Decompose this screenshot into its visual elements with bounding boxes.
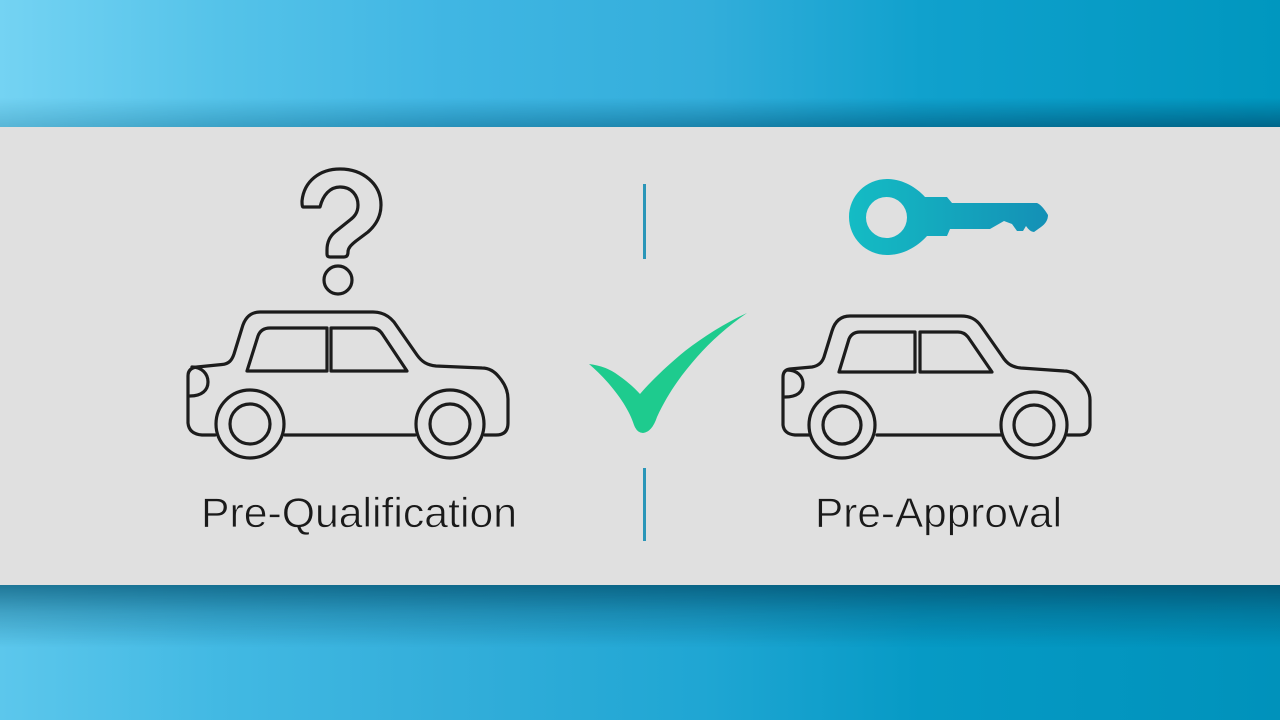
background bottom band [0,580,1280,720]
divider top [643,184,646,259]
panel: comparison band [0,127,1280,585]
bottom band shadow [0,585,1280,640]
label: Pre-Approval: Pre-Approval [815,489,1062,536]
icon: green check mark [589,313,747,433]
label: Pre-Qualification: Pre-Qualification [201,489,517,536]
icon: car left [188,312,508,458]
divider bottom [643,468,646,541]
top band shadow [0,102,1280,127]
icon: question mark [302,169,381,294]
icon: key [849,179,1048,255]
background top band [0,0,1280,130]
icon: car right [783,316,1090,458]
